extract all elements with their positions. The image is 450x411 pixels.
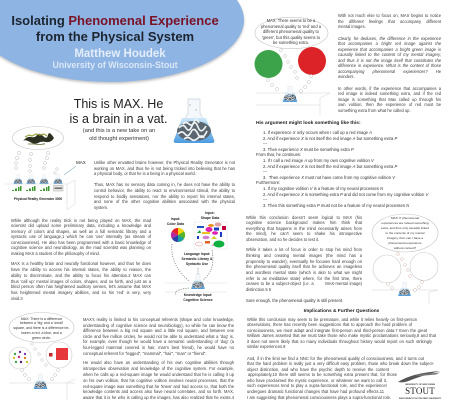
diagram labels: Knowledge Input: [184, 292, 212, 296]
text: clearly he deduces: and thus it is not the image itself that constitutes the [338, 58, 441, 63]
speech: difference between big and small: tween a red, a blue, and a [21, 331, 62, 335]
diagram labels: Syntactic Use [186, 262, 208, 266]
text: cognitive abilities: aware that it is he who is calling up the images, has also realized that he exists.4 [83, 395, 234, 400]
text: healthy brain [11, 261, 151, 301]
text: implications paragraph two: such experiences tend to play a supra-functional role, and the experiencer [247, 383, 387, 388]
illustration: Physical Reality Generator [5, 126, 76, 210]
affiliation: University of Wisconsin-Stout [52, 60, 178, 70]
text: in other words: something extra from what he called up. [338, 108, 411, 113]
speech: experience without content [381, 216, 429, 250]
text: no sensory data: system. [94, 205, 108, 210]
text: envatted brains: Unlike other envatted brains however, the Physical Reality Generator is not [94, 160, 235, 165]
heading: implications: Implications & Further Questions [304, 309, 379, 314]
text: implications paragraph one: consciousness, we must adapt and integrate first-person and third-person data.7 Even the great [247, 328, 427, 333]
text: meditative state: ceases to be a subject-object (i.e. a MAX-mental image) [246, 281, 362, 286]
text: in other words: In other words, if the experience that accompanies a [338, 86, 441, 90]
diagram labels: Input: [205, 211, 215, 215]
text: preliminary data: cognitive science and neurobiology, as the mad scientist was planning on [11, 245, 151, 250]
text: clearly he deduces: difference in experience. What is the content of those [338, 63, 441, 68]
diagram labels: Language Input: [184, 252, 210, 256]
argument list [256, 130, 428, 208]
text: sure enough: Sure enough, the phenomenal quality is still present. [246, 298, 343, 303]
text: decides to test: observation, and so he decides to test it. [246, 236, 319, 242]
text: in other words: image is something that Max called up through his [338, 97, 441, 102]
speech: phenomenal quality: different phenomenal quality to [263, 29, 319, 34]
text: in other words [338, 86, 441, 113]
argument list: 2. And if experience X is something extra P and did not come from my cognitive volition V [263, 192, 428, 197]
subheading: new take: old thought experiment) [89, 136, 149, 142]
text: no sensory data: respond to bodily sensations, nor the ability to report his internal states, [94, 194, 235, 199]
text: implications paragraph two: who have proclaimed the mystic experience, or whatever we want to call it, [247, 378, 387, 383]
heading: argument: His argument might look something like this: [256, 120, 361, 126]
text: healthy brain: have the ability to access his internal states, the ability to reason, the [11, 267, 151, 272]
text: meditative state: and wordless mental state (which is akin to what we might [246, 270, 362, 275]
text: decides to test: While this conclusion doesn't seem logical to MAX (his [246, 214, 362, 220]
subheading: new take: (and this is a new take on an [83, 128, 155, 134]
text: clearly he deduces [338, 36, 441, 79]
argument list: 3. Then this something extra P must not be a feature of my neural processes N [263, 203, 409, 208]
text: healthy brain: MAX is a healthy brain and neurally functional however, and thus he does [11, 261, 151, 266]
title: Isolating Phenomenal Experience [11, 13, 219, 28]
argument list: 1. If experience X only occurs when I call up a red image A [263, 130, 372, 135]
text: preliminary data: consciousness). He also has been programmed with a basic knowledge of [11, 240, 151, 245]
text: clearly he deduces: that accompanies a bright red image against the [338, 41, 441, 46]
speech: experience without content: imagery, then can I have a [387, 236, 423, 240]
diagram labels: Semantic Library & [182, 257, 212, 261]
argument list: Furthermore: [256, 180, 280, 185]
text: implications paragraph two: that the hard problem is really just a very difficult easy problem, those who break down the subject- [247, 361, 434, 366]
text: implications paragraph one: William James asserted that we must take those who make mystic proclamations seriously,8 and that [247, 333, 436, 338]
text: implications paragraph one: While this conclusion may seem to be premature, and while it relies heavily on first-person [247, 317, 417, 322]
text: clearly he deduces: experience that accompanies a bright green image is [338, 47, 441, 52]
text: MAX notices feelings: mental images. [338, 24, 366, 29]
text: implications paragraph two: And, if in the limit we find a NNC for the phenomenal quality of consciousness, and it turns out [247, 356, 424, 360]
text: cognitive abilities: red-square image was something that he 'knew' and had access to, that both the [83, 384, 234, 389]
diagram labels: Color Data [167, 222, 184, 226]
diagram labels [167, 211, 220, 302]
text: meditative state: refer to as meditative state) where, for the first time, there [246, 276, 362, 281]
text: no sensory data: Thus, MAX has no sensory data coming in, he does not have the ability to [94, 182, 235, 187]
header ellipse [0, 0, 244, 84]
text: decides to test: the mind), he can't seem to shake his introspective [246, 231, 362, 236]
subheading: new take [83, 128, 155, 142]
heading: This is MAX: This is MAX. He [74, 97, 163, 111]
speech: phenomenal quality [261, 18, 321, 45]
text: MAX notices feelings: the different feelings that accompany different [338, 19, 441, 24]
argument list: 3. Then experience X must not have come from my cognitive volition V [263, 175, 395, 180]
text: cognitive abilities: on his own volition, that his cognitive volition involves neural processes, that the [83, 378, 234, 383]
text: conceptual referents [83, 317, 234, 356]
icon: large brain in flask [174, 99, 214, 143]
speech: difference between big and small [13, 316, 70, 340]
text: implications paragraph one: observations, there has recently been suggestions that to approach the hard problem of [247, 322, 412, 327]
shape data panel [194, 222, 227, 249]
illustration: MAX with colors and squares [9, 312, 75, 400]
text: envatted brains: working on MAX, and thus he is not being tricked into believing that he has [94, 166, 235, 171]
text: healthy brain: thus 'call up' mental images of colors, shapes, and so forth, and just as a [11, 279, 151, 284]
text: clearly he deduces: causally linked to the content of my mental imagery, [338, 52, 441, 57]
text: conceptual referents: MAX's reality is limited to his conceptual referents (shape and color knowledge, [83, 317, 234, 322]
text: cognitive abilities: introspective observation and knowledge of the cognitive system. For example, [83, 366, 234, 371]
argument list: --- [263, 141, 267, 146]
text: meditative state: While it takes a lot of focus in order to stop his mind from [246, 247, 362, 252]
speech: experience without content: to the contents of my mental [386, 231, 424, 235]
text: no sensory data: and none of the other cognitive abilities associated with the physical [94, 199, 235, 204]
text: preliminary data: making MAX a student of the philosophy of mind. [11, 251, 100, 256]
speech: experience without content: phenomenal experience [388, 241, 422, 245]
text: implications paragraph one: similar experiences.9 [247, 344, 285, 349]
text: healthy brain: ability to discriminate, and the ability to focus his attention.2 MAX can [11, 273, 151, 278]
logo: tagline: WISCONSIN'S POLYTECHNIC UNIVERSITY [399, 398, 441, 400]
text: no sensory data [94, 182, 235, 210]
speech: experience without content: MAX: If phenomenal [391, 216, 419, 220]
text: clearly he deduces: Clearly, he deduces, the difference in the experience [338, 36, 441, 40]
text: conceptual referents: four-legged mammal covered in hair, man's best friend), he would have no [83, 345, 234, 350]
text: meditative state: the phenomenal quality itself that he achieves an imageless [246, 264, 362, 269]
title [11, 13, 219, 44]
illustration: MAX imageless state [372, 214, 438, 304]
text: preliminary data: While although the reality trick is not being played on MAX, the mad [11, 218, 151, 222]
text: in other words: red image is indeed something extra, and if the red [338, 91, 441, 96]
text: preliminary data: scientist did upload some preliminary data, including a knowledge and [11, 223, 151, 228]
diagram: inputs to MAX [165, 222, 227, 295]
text: implications paragraph two: object distinction, and who have the psychic depth to receive the content [247, 367, 389, 372]
text: implications paragraph one: it does not seem likely that so many individuals throughout history would report on such strikingly [247, 339, 432, 344]
speech: difference between big and small: between a 'big' and a 'small' [20, 321, 63, 325]
text: conceptual referents: understanding of cognitive science and neurobiology), so while he can know the [83, 323, 234, 328]
speech: phenomenal quality: phenomenal quality to 'red' and a [261, 24, 321, 29]
illustration: MAX notices red and green [254, 17, 330, 115]
argument list: 1. If I call a red image A up from my own cognitive volition V [263, 158, 374, 163]
speech: phenomenal quality: MAX: There seems to be a [267, 18, 315, 23]
text: conceptual referents: conceptual referent for "legged", "mammal", "hair", "man" or "friend". [83, 351, 207, 356]
speech: phenomenal quality: 'green', but this quality seems to [262, 35, 320, 40]
text: conceptual referents: for example, even though he would have a semantic understanding of 'dog' (a [83, 339, 234, 344]
speech: phenomenal quality: be something extra. [273, 40, 309, 45]
logo: university name: UNIVERSITY OF WISCONSIN [405, 384, 435, 386]
speech: experience without content: without content? [394, 246, 416, 250]
text: cognitive abilities: when he calls up a red-square image he would understand that he is calling it up [83, 372, 234, 377]
logo: STOUT: STOUT [405, 386, 435, 396]
author: Matthew Houdek [74, 48, 166, 60]
text: cognitive abilities: knowledge contents and access also have neural correlates, and so forth. MAX, [83, 389, 234, 394]
text: envatted brains [94, 160, 235, 176]
heading: This is MAX [70, 97, 167, 126]
title: from the Physical System [36, 29, 194, 44]
text: clearly he deduces: wonders. [338, 74, 355, 79]
argument list: 2. And if experience X is not itself the red image A but something extra P [263, 164, 397, 169]
text: clearly he deduces: accompanying phenomenal experiences? He [338, 69, 441, 74]
argument list: --- [263, 169, 267, 174]
text: healthy brain: blind person often has heightened auditory senses, let's assume that MAX [11, 284, 151, 289]
argument list: 2. And if experience X is not itself the red image A but something extra P [263, 136, 397, 141]
text: preliminary data: syntactic use of language,1 which he can 'use' internally (as stream of [11, 234, 151, 239]
text: implications paragraph two: I am suggesting that phenomenal consciousness plays a supra-functional role. [247, 395, 391, 400]
text: envatted brains: a physical body, or that he is a being in a physical world. [94, 171, 196, 176]
speech: experience without content: experiences are indeed something [381, 221, 429, 225]
text: implications paragraph two: undergoes dramatic functional changes that have had profound effects.11 [247, 389, 384, 394]
text: meditative state: propensity to wander), eventually he focuses hard enough on [246, 259, 362, 264]
label: Physical Reality Generator 3000: Physical Reality Generator 3000 [14, 197, 62, 201]
text: decides to test: cognitive science background makes him think that [246, 220, 362, 225]
text: implications paragraph two: appropriately,10 there still seems to be something extra present that, for those [248, 372, 397, 377]
text: conceptual referents: difference between a big red square and a little red square, and between one [83, 328, 234, 333]
text: meditative state: thinking and creating mental images (the mind has a [246, 253, 362, 258]
text: preliminary data: memory of colors and shapes, as well as a full semantic library and a [11, 229, 151, 234]
argument list: From that, he continues: [256, 152, 301, 157]
text: MAX notices feelings [338, 13, 441, 29]
label: MAX: MAX [76, 160, 86, 165]
text: implications paragraph one [247, 317, 436, 349]
diagram labels: Input: [171, 216, 180, 220]
text: preliminary data [11, 218, 151, 256]
heading: This is MAX: is a brain in a vat. [70, 112, 167, 126]
text: implications paragraph two [247, 356, 434, 400]
speech: difference between big and small: MAX: There is a difference [21, 316, 62, 320]
logo swoosh [398, 371, 440, 382]
text: cognitive abilities: He would also have an understanding of his own cognitive abilities through [83, 360, 234, 365]
text: MAX notices feelings: With not much else to focus on, MAX begins to notice [338, 13, 441, 18]
text: conceptual referents: circle and five million circles, he would not be able to understand what a 'dog' is, [83, 334, 234, 339]
argument list: --- [263, 197, 267, 202]
color wheel [171, 228, 185, 242]
text: decides to test: everything that happens in the mind necessarily arises from [246, 226, 362, 230]
speech: difference between big and small: green circle. [32, 336, 51, 340]
diagram labels: Shape Data [201, 216, 219, 220]
text: meditative state: distinction.5 6 [246, 287, 271, 292]
text: decides to test [246, 214, 362, 242]
text: healthy brain: vivid.3 [11, 296, 23, 301]
argument list: 3. Then experience X must be something extra P [263, 147, 354, 152]
text: healthy brain: has heightened mental imagery abilities, and so his 'red' is very, very [11, 290, 151, 295]
speech: experience without content: extra, and thus only causally linked [381, 226, 429, 230]
argument list: 1. If my cognitive volition V is a feature of my neural processes N [263, 186, 383, 191]
speech: difference between big and small: square, and there is a difference be- [13, 326, 70, 330]
diagram labels: Cognitive Science [183, 298, 213, 302]
text: no sensory data: control behavior, the ability to react to environmental stimuli, the ability to [94, 188, 235, 193]
text: meditative state [246, 247, 362, 292]
text: in other words: own volition, then the experience of red must be [338, 102, 441, 107]
text: cognitive abilities [83, 360, 234, 400]
